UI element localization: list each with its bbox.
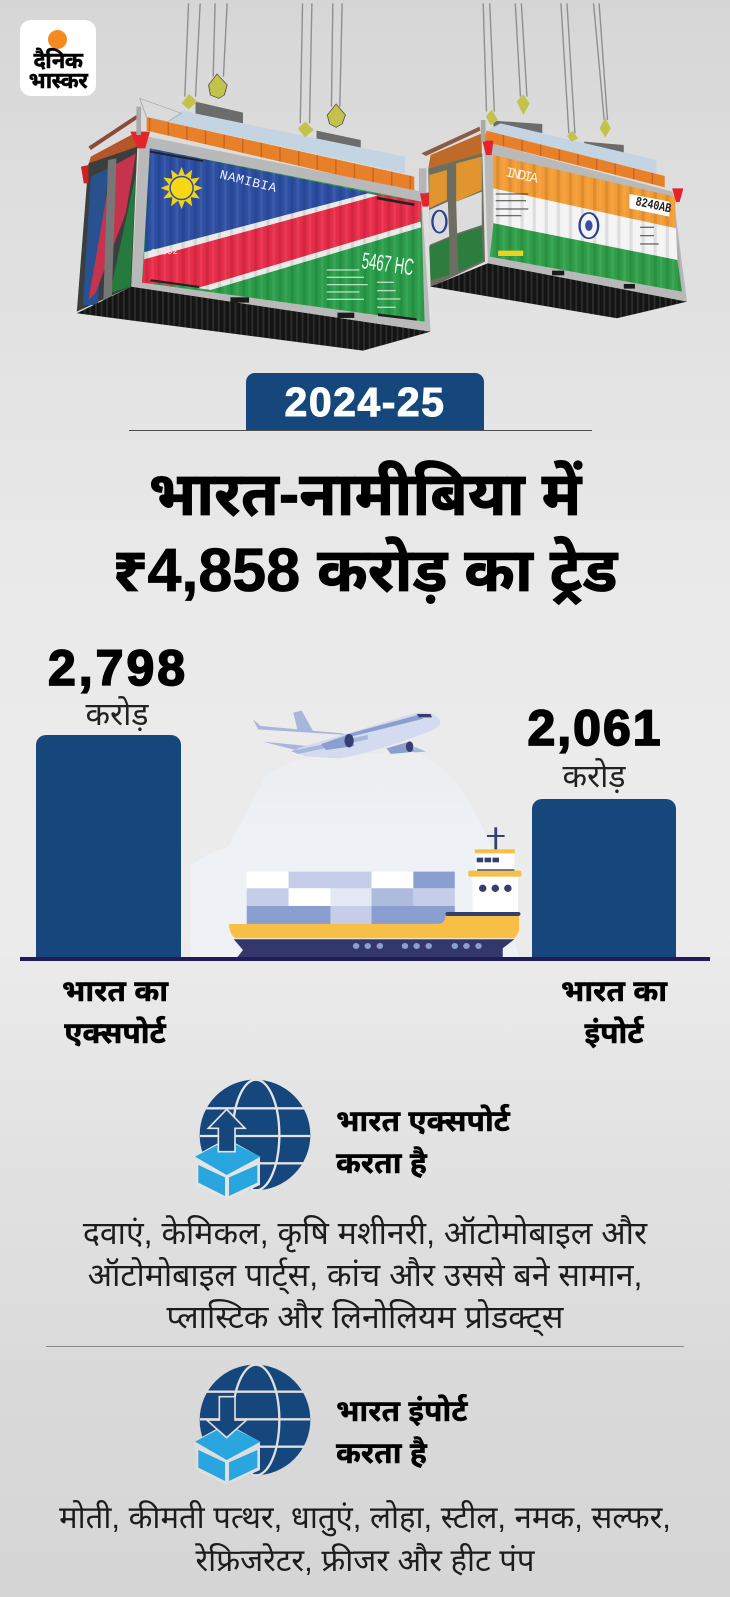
export heading (336, 1104, 510, 1180)
title: भारत-नामीबिया में (149, 460, 581, 528)
logo sun (48, 30, 67, 49)
import label: भारत का (561, 975, 667, 1008)
import heading: करता है (336, 1437, 427, 1470)
icon: globe with import box (195, 1364, 310, 1481)
container number: India: 8240AB (634, 194, 673, 216)
import label (561, 975, 668, 1050)
import value: 2,061 (527, 700, 663, 756)
container label: Namibia: NAMIBIA (218, 167, 278, 196)
badge rule (129, 430, 592, 431)
logo: Dainik Bhaskar (20, 20, 96, 96)
export goods list: दवाएं, केमिकल, कृषि मशीनरी, ऑटोमोबाइल और (83, 1215, 647, 1251)
icon: Namibian sun (161, 167, 203, 209)
container serial: Namibia: 27652 (151, 247, 178, 258)
logo wordmark (29, 48, 88, 93)
import unit: करोड़ (562, 758, 626, 794)
export heading: करता है (336, 1147, 427, 1180)
ship (229, 827, 521, 958)
import goods list: रेफ्रिजरेटर, फ्रीजर और हीट पंप (196, 1543, 534, 1578)
export goods list: प्लास्टिक और लिनोलियम प्रोडक्ट्स (167, 1299, 563, 1335)
plane (253, 711, 440, 758)
import label: इंपोर्ट (584, 1017, 644, 1050)
export label (62, 975, 169, 1050)
icon: globe with export box (195, 1080, 310, 1196)
export value: 2,798 (48, 640, 188, 696)
export label: भारत का (62, 975, 168, 1008)
export bar (36, 735, 181, 959)
import heading (336, 1394, 468, 1470)
import heading: भारत इंपोर्ट (336, 1395, 467, 1428)
logo wordmark: दैनिक (33, 48, 83, 73)
import goods list: मोती, कीमती पत्थर, धातुएं, लोहा, स्टील, नमक, सल्फर, (59, 1500, 671, 1535)
year text: 2024-25 (285, 379, 445, 425)
container number: Namibia: 5467 HC (360, 247, 415, 280)
container label: India: INDIA (504, 165, 540, 188)
import goods list (59, 1500, 671, 1578)
export goods list: ऑटोमोबाइल पार्ट्स, कांच और उससे बने सामान, (88, 1257, 642, 1293)
export heading: भारत एक्सपोर्ट (336, 1105, 510, 1138)
chart baseline (20, 957, 710, 961)
title (113, 460, 619, 606)
hero illustration: hanging containers (76, 3, 687, 351)
section divider (46, 1346, 684, 1347)
export goods list (82, 1215, 648, 1336)
logo wordmark: भास्कर (29, 68, 87, 93)
title: ₹4,858 करोड़ का ट्रेड (113, 536, 617, 604)
year badge (246, 373, 484, 431)
export unit: करोड़ (85, 696, 149, 732)
import bar (532, 799, 676, 959)
container: India (421, 3, 687, 318)
export label: एक्सपोर्ट (64, 1017, 166, 1050)
container: Namibia (77, 3, 434, 351)
